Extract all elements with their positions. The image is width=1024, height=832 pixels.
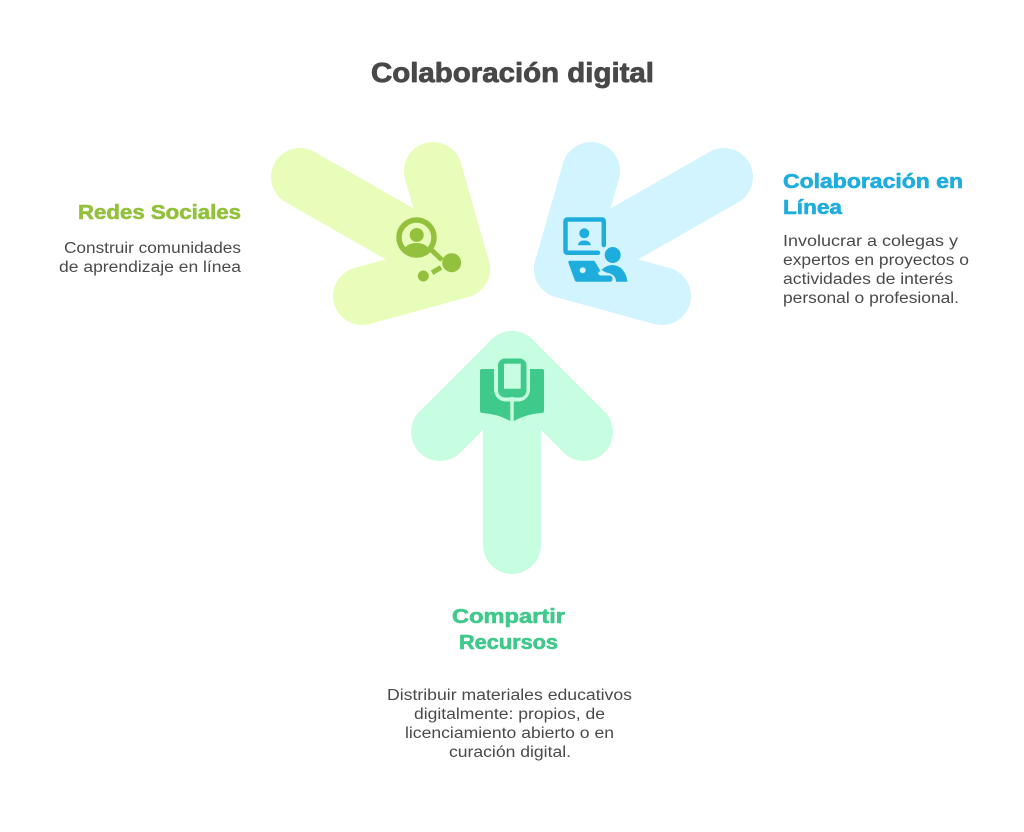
heading: Colaboración en Línea — [783, 171, 963, 219]
heading: Colaboración en Línea: Colaboración en — [783, 171, 963, 193]
panel: Compartir Recursos — [387, 352, 632, 761]
panel: Colaboración en Línea — [563, 171, 969, 307]
icon: book with phone — [480, 352, 544, 422]
text: Colaboración en Línea description — [783, 233, 969, 307]
icon: magnifier with person and nodes — [399, 220, 461, 282]
text: Colaboración en Línea description: expertos en proyectos o — [783, 252, 969, 269]
icon: video call with laptop — [566, 220, 628, 282]
arrow: green pointing lower right — [300, 171, 461, 296]
text: Colaboración en Línea description: personal o profesional. — [783, 290, 959, 307]
heading: Colaboración en Línea: Línea — [783, 197, 843, 219]
arrow: mint pointing up — [440, 360, 584, 545]
text: Compartir Recursos description: Distribuir materiales educativos — [387, 687, 632, 704]
title: Colaboración digital — [371, 57, 654, 88]
text: Compartir Recursos description: digitalmente: propios, de — [414, 706, 605, 723]
heading: Redes Sociales: Redes Sociales — [78, 202, 241, 224]
heading: Compartir Recursos: Compartir — [452, 606, 565, 628]
text: Compartir Recursos description: licenciamiento abierto o en — [405, 725, 614, 742]
arrow: blue pointing lower left — [563, 171, 724, 296]
text: Compartir Recursos description: curación digital. — [449, 744, 571, 761]
heading: Compartir Recursos — [452, 606, 565, 654]
heading: Compartir Recursos: Recursos — [459, 632, 558, 654]
text: Redes Sociales description — [59, 240, 241, 276]
text: Redes Sociales description: Construir comunidades — [64, 240, 241, 257]
text: Colaboración en Línea description: actividades de interés — [783, 271, 953, 288]
panel: Redes Sociales — [59, 171, 461, 296]
text: Redes Sociales description: de aprendizaje en línea — [59, 259, 241, 276]
text: Colaboración en Línea description: Involucrar a colegas y — [783, 233, 958, 250]
text: Compartir Recursos description — [387, 687, 632, 761]
